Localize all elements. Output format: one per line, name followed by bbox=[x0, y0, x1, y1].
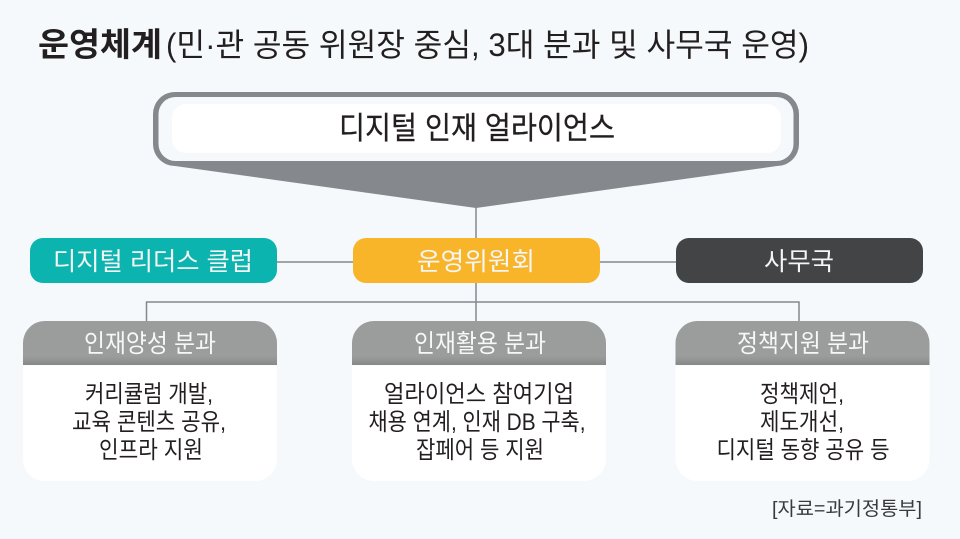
box: digital leaders club bbox=[30, 238, 277, 283]
body: policy support: 디지털 동향 공유 등 bbox=[716, 437, 890, 464]
panel: policy support subcommittee bbox=[676, 321, 930, 481]
box: steering committee: 운영위원회 bbox=[417, 248, 535, 276]
body: talent utilization: 잡페어 등 지원 bbox=[416, 437, 544, 464]
box: secretariat bbox=[676, 238, 923, 283]
panel: talent development subcommittee bbox=[23, 321, 277, 481]
box: digital leaders club: 디지털 리더스 클럽 bbox=[53, 248, 253, 276]
header: talent development: 인재양성 분과 bbox=[84, 330, 216, 358]
title: (민·관 공동 위원장 중심, 3대 분과 및 사무국 운영) bbox=[166, 27, 809, 63]
body: talent development: 인프라 지원 bbox=[99, 437, 203, 464]
source note: [자료=과기정통부] bbox=[772, 498, 922, 520]
body: talent utilization: 채용 연계, 인재 DB 구축, bbox=[368, 409, 586, 436]
header: policy support: 정책지원 분과 bbox=[737, 330, 869, 358]
title: 운영체계 bbox=[38, 26, 162, 63]
box: steering committee bbox=[353, 238, 600, 283]
body: talent utilization bbox=[352, 366, 606, 481]
body: talent development bbox=[23, 366, 277, 481]
body: policy support bbox=[676, 366, 930, 481]
panel: digital talent alliance funnel: 디지털 인재 얼라이언스 bbox=[339, 111, 615, 146]
body: talent utilization: 얼라이언스 참여기업 bbox=[384, 381, 574, 408]
header: talent utilization bbox=[352, 321, 606, 365]
panel: digital talent alliance funnel bbox=[153, 92, 799, 208]
body: policy support: 정책제언, bbox=[760, 381, 844, 408]
body: talent development: 커리큘럼 개발, bbox=[85, 381, 213, 408]
header: talent development bbox=[23, 321, 277, 365]
header: policy support bbox=[676, 321, 930, 365]
panel: talent utilization subcommittee bbox=[352, 321, 606, 481]
box: secretariat: 사무국 bbox=[764, 248, 834, 276]
body: talent development: 교육 콘텐츠 공유, bbox=[72, 409, 226, 436]
connector lines bbox=[146, 205, 799, 321]
header: talent utilization: 인재활용 분과 bbox=[414, 330, 546, 358]
body: policy support: 제도개선, bbox=[760, 409, 844, 436]
